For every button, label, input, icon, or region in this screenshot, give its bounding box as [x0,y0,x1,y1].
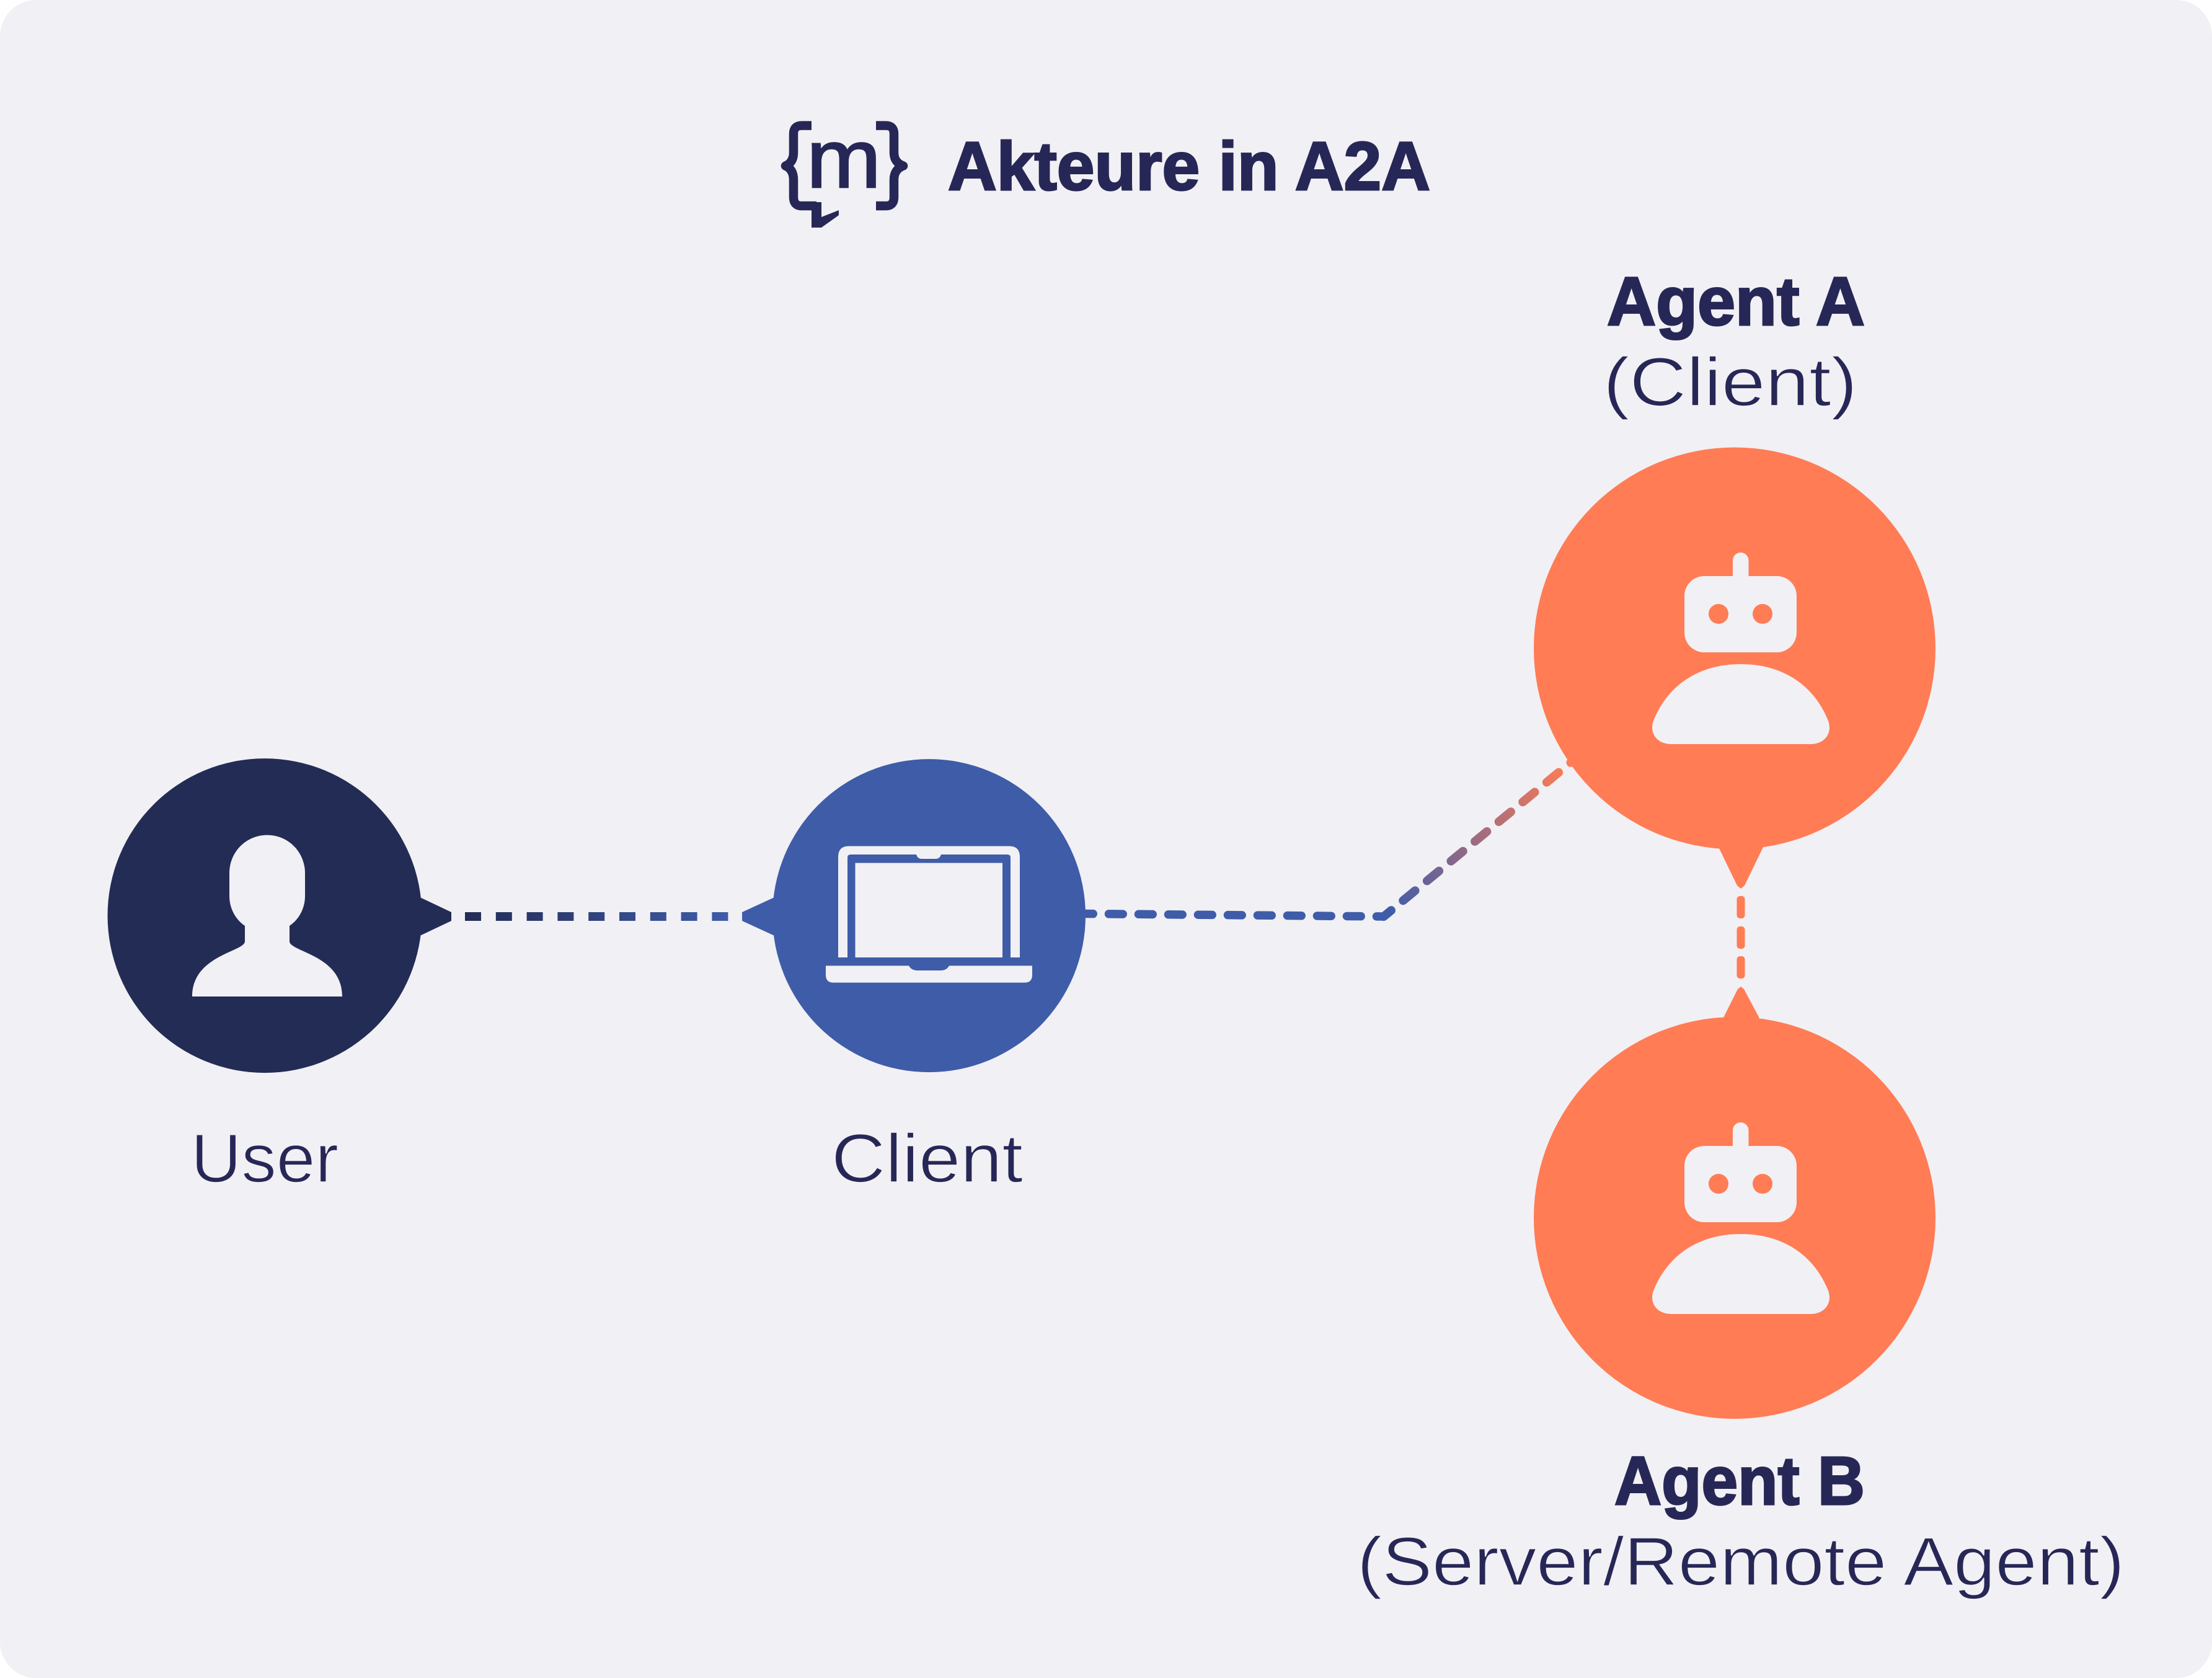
label: agent B: Agent B [1614,1443,1865,1519]
label: agent A [1603,264,1865,420]
node: client [742,759,1086,1072]
icon: brand logo [785,113,903,228]
node: user [108,758,451,1073]
label: agent A: Agent A [1607,264,1865,340]
label: agent B: (Server/Remote Agent) [1357,1524,2125,1600]
label: user: User [191,1121,338,1197]
title: Akteure in A2A [948,128,1430,205]
arrow: user to client dashed connector [465,912,729,921]
label: agent B [1357,1443,2125,1600]
arrow: client to agent A dashed connector [1085,760,1573,917]
label: client: Client [831,1121,1023,1197]
node: agent B [1534,987,1935,1419]
node: agent A [1534,448,1935,889]
icon: robot B [1652,1122,1829,1314]
header: logo and title [785,113,1430,228]
label: agent A: (Client) [1603,344,1857,420]
icon: robot A [1652,553,1829,744]
icon: person silhouette [192,835,342,997]
arrow: agent A to agent B dashed connector [1737,896,1745,979]
icon: brand logo: m [807,113,881,205]
icon: laptop [826,846,1032,983]
